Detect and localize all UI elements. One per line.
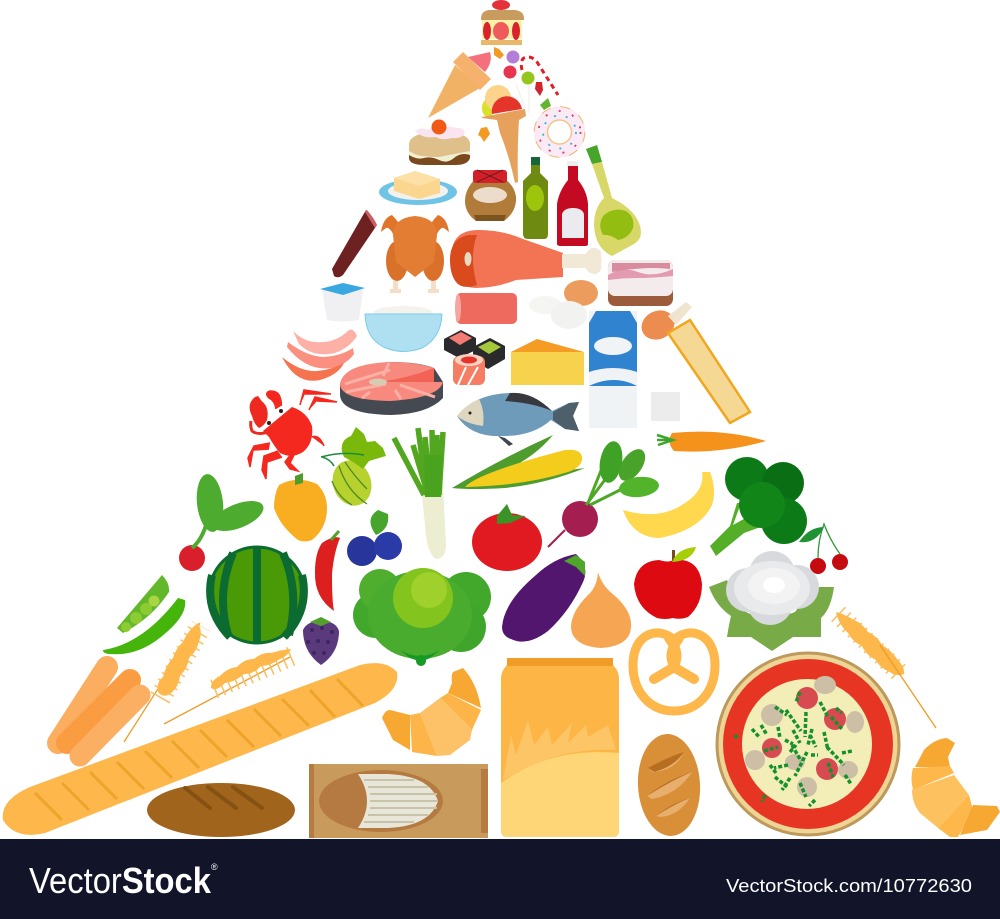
image id: VectorStock.com/10772630 [726,875,972,896]
icon: doughnut [534,107,585,157]
icon: blackberry [303,617,339,665]
icon: salmon steak [340,362,443,415]
icon: red apple [634,547,702,619]
icon: milk glass [651,392,680,421]
icon: pasta packet [309,764,488,838]
icon: ice cream with scoops [482,85,526,183]
logo: VectorStock: VectorStock [29,860,212,901]
icon: croissant centre [382,668,481,756]
registered mark: ® [211,862,218,872]
icon: watermelon [208,546,306,644]
icon: strawberry cake [481,0,524,45]
icon: roast chicken [381,215,449,293]
icon: milk carton [589,311,637,428]
icon: jam jar [465,170,516,221]
icon: beetroot with leaves [548,439,660,547]
icon: ketchup bottle [557,161,588,246]
icon: baguette [3,663,397,835]
icon: croissant right [912,738,1000,837]
icon: leafy herb and gooseberry [321,427,386,511]
icon: wheat ear middle [164,649,292,724]
icon: green cabbage [353,568,491,666]
icon: banana [623,472,714,538]
icon: carrot [657,432,766,452]
icon: flour jar [501,658,619,837]
icon: corn [452,435,585,489]
icon: wheat ear right [836,612,936,728]
icon: cherries [799,524,848,574]
icon: butter on plate [379,171,457,205]
icon: tomato [472,504,542,571]
icon: onion [571,572,631,648]
icon: sweets and candy [478,47,558,142]
icon: cheese block [511,339,584,385]
icon: spring onion [394,428,446,559]
icon: bread sticks [58,667,140,756]
icon: ham leg [450,230,602,288]
icon: olive oil bottle [523,157,548,239]
icon: sushi rolls [444,330,505,385]
icon: pizza [717,653,899,835]
icon: chicken drumstick [637,302,692,345]
icon: cheese wedge long [668,320,750,423]
icon: broccoli [710,457,807,556]
icon: pretzel [633,633,715,711]
icon: chilli pepper [315,531,340,611]
icon: wheat ear left [124,623,201,742]
icon: eggs [529,280,598,329]
icon: eggplant [502,554,585,642]
icon: tilted ice cream cone [428,52,491,118]
icon: bread roll [635,732,703,838]
icon: cauliflower [709,551,834,651]
icon: radish with leaves [179,473,268,571]
icon: crab [248,390,337,479]
icon: layered cake [409,120,470,165]
icon: yellow pepper [274,473,327,542]
footer bar [0,839,1000,919]
icon: lime dressing bottle [586,145,641,256]
icon: pea pod [103,575,185,654]
icon: shrimps [282,330,357,381]
icon: dark bread [147,783,295,837]
icon: salami [455,293,517,324]
icon: sausage [332,210,377,277]
icon: fish [457,393,579,446]
icon: rice bowl [365,306,442,352]
icon: bacon slab [608,260,673,306]
icon: blueberries [347,510,402,566]
icon: yoghurt cup [320,283,365,322]
